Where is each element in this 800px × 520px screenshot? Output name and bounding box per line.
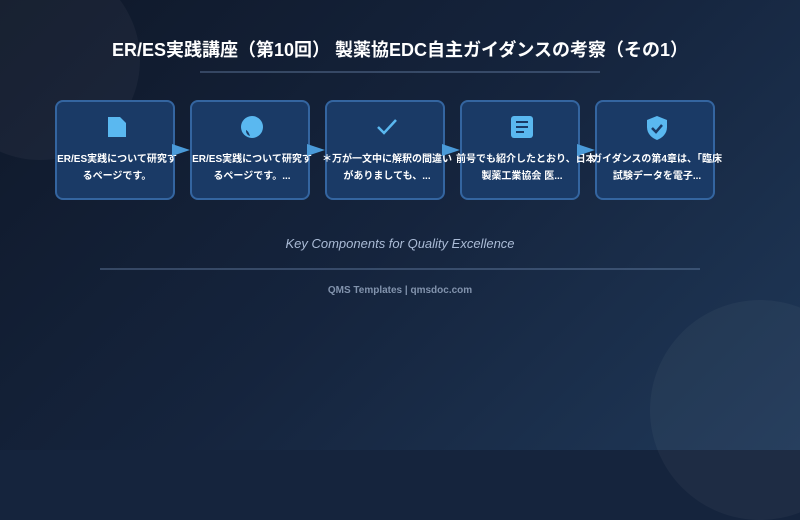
text 5 bbox=[592, 152, 722, 182]
subtitle: Key Components for Quality Excellence bbox=[285, 236, 515, 251]
title: ER/ES実践講座（第10回） 製薬協EDC自主ガイダンスの考察（その1） bbox=[112, 40, 688, 60]
text 1: ER/ES実践について研究す bbox=[57, 154, 177, 165]
text 2: るページです。... bbox=[213, 171, 291, 182]
arrow 3 bbox=[442, 144, 460, 156]
arrow 1 bbox=[172, 144, 190, 156]
text 3: がありましても、... bbox=[343, 171, 431, 182]
text 4 bbox=[456, 153, 596, 182]
card 4 bbox=[460, 100, 580, 200]
icon: circle bbox=[241, 116, 263, 138]
icon: check bbox=[377, 119, 397, 135]
card 2 bbox=[190, 100, 310, 200]
text 5: ガイダンスの第4章は、「臨床 bbox=[592, 154, 722, 165]
text 2: ER/ES実践について研究す bbox=[192, 154, 312, 165]
text 4: 前号でも紹介したとおり、日本 bbox=[456, 154, 596, 165]
text 4: 製薬工業協会 医... bbox=[481, 171, 563, 182]
text 2 bbox=[192, 153, 312, 182]
text 1: るページです。 bbox=[83, 171, 151, 182]
text 5: 試験データを電子... bbox=[613, 171, 701, 182]
text 3: ＊万が一文中に解釈の間違い bbox=[322, 154, 452, 165]
arrow 2 bbox=[307, 144, 325, 156]
text 3 bbox=[322, 152, 452, 182]
icon: document bbox=[108, 117, 126, 137]
card 5 bbox=[595, 100, 715, 200]
footer: QMS Templates | qmsdoc.com bbox=[328, 285, 472, 296]
icon: note bbox=[511, 116, 533, 138]
card 3 bbox=[325, 100, 445, 200]
icon: shield bbox=[647, 116, 667, 140]
arrow 4 bbox=[577, 144, 595, 156]
text 1 bbox=[57, 153, 177, 182]
card 1 bbox=[55, 100, 175, 200]
